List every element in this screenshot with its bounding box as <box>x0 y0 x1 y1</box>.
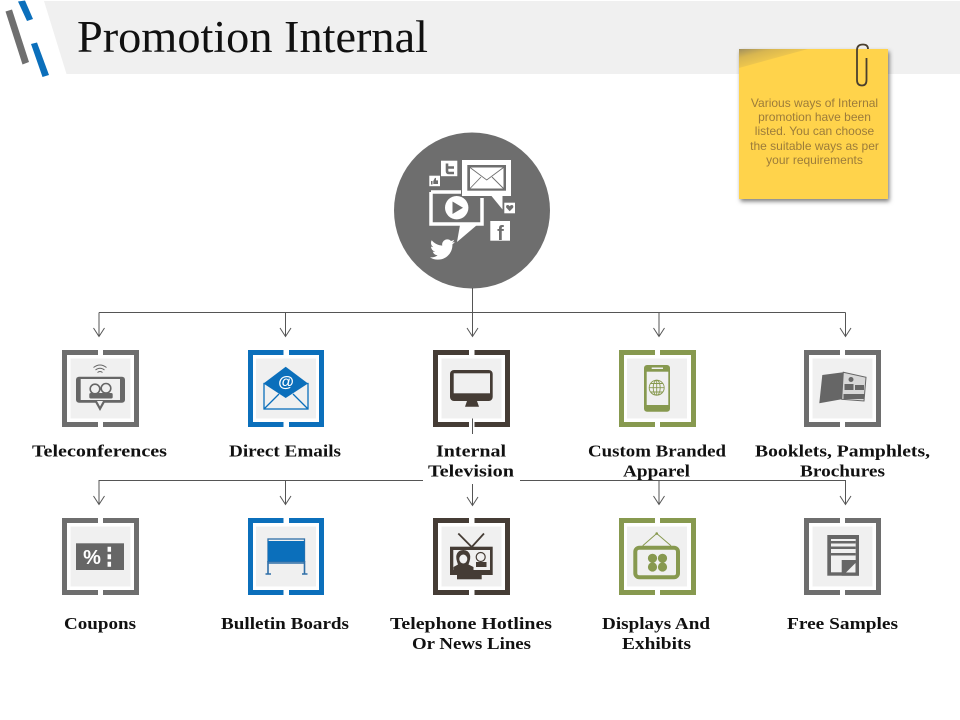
label: Telephone Hotlines <box>390 614 553 633</box>
item: Direct Emails <box>250 352 322 424</box>
label: Internal <box>436 442 507 460</box>
label: Displays And <box>602 614 710 633</box>
item: Displays And Exhibits <box>622 520 694 592</box>
icon: news television <box>450 534 493 579</box>
item: Free Samples <box>806 520 878 592</box>
note text: your requirements <box>766 153 863 167</box>
icon: heart square <box>504 203 515 213</box>
icon: like square <box>429 176 440 186</box>
label: Bulletin Boards <box>221 614 350 633</box>
label: Coupons <box>64 614 137 633</box>
label: Exhibits <box>622 634 692 653</box>
item: Booklets, Pamphlets, Brochures <box>806 352 878 424</box>
item: Telephone Hotlines Or News Lines <box>436 520 508 592</box>
icon: paperclip <box>857 44 868 86</box>
title: Promotion Internal <box>77 12 428 62</box>
icon: coupon: % <box>83 547 101 569</box>
icon: facebook square <box>490 221 510 245</box>
header band <box>6 0 960 77</box>
icon: twitter square <box>441 161 457 176</box>
note text: listed. You can choose <box>755 124 875 138</box>
label: Apparel <box>623 462 690 480</box>
icon: presenter <box>454 550 474 575</box>
icon: twitter bird <box>430 239 455 260</box>
note text: promotion have been <box>758 110 871 124</box>
icon: video call phone <box>76 365 125 411</box>
icon: board on stand <box>266 539 308 574</box>
icon: mail bubble <box>462 160 511 210</box>
label: Custom Branded <box>588 442 726 460</box>
icon: facebook square: f <box>497 223 504 245</box>
icon: document <box>827 535 859 576</box>
icon: open envelope: @ <box>278 374 294 391</box>
connector arrows: bottom row <box>94 418 851 506</box>
icon: video bubble <box>431 192 482 242</box>
icon: hanging sign <box>635 532 678 577</box>
sticky note <box>739 44 888 199</box>
note text <box>750 96 879 167</box>
note text: the suitable ways as per <box>750 139 879 153</box>
item: Custom Branded Apparel <box>622 352 694 424</box>
label: Brochures <box>800 462 886 480</box>
central circle with social media icons <box>394 132 550 288</box>
label: Or News Lines <box>412 634 532 653</box>
label: Teleconferences <box>32 442 168 460</box>
icon: smartphone with globe <box>644 365 670 412</box>
item: Bulletin Boards <box>250 520 322 592</box>
label: Television <box>428 462 514 480</box>
item: Internal Television <box>436 352 508 424</box>
connector arrows: top row <box>94 288 851 336</box>
note text: Various ways of Internal <box>751 96 878 110</box>
item: Coupons <box>64 520 136 592</box>
item: Teleconferences <box>64 352 136 424</box>
icon: open brochure <box>819 372 866 403</box>
label: Booklets, Pamphlets, <box>755 442 930 460</box>
label: Free Samples <box>787 614 899 633</box>
label: Direct Emails <box>229 442 342 460</box>
icon: monitor <box>450 370 493 407</box>
